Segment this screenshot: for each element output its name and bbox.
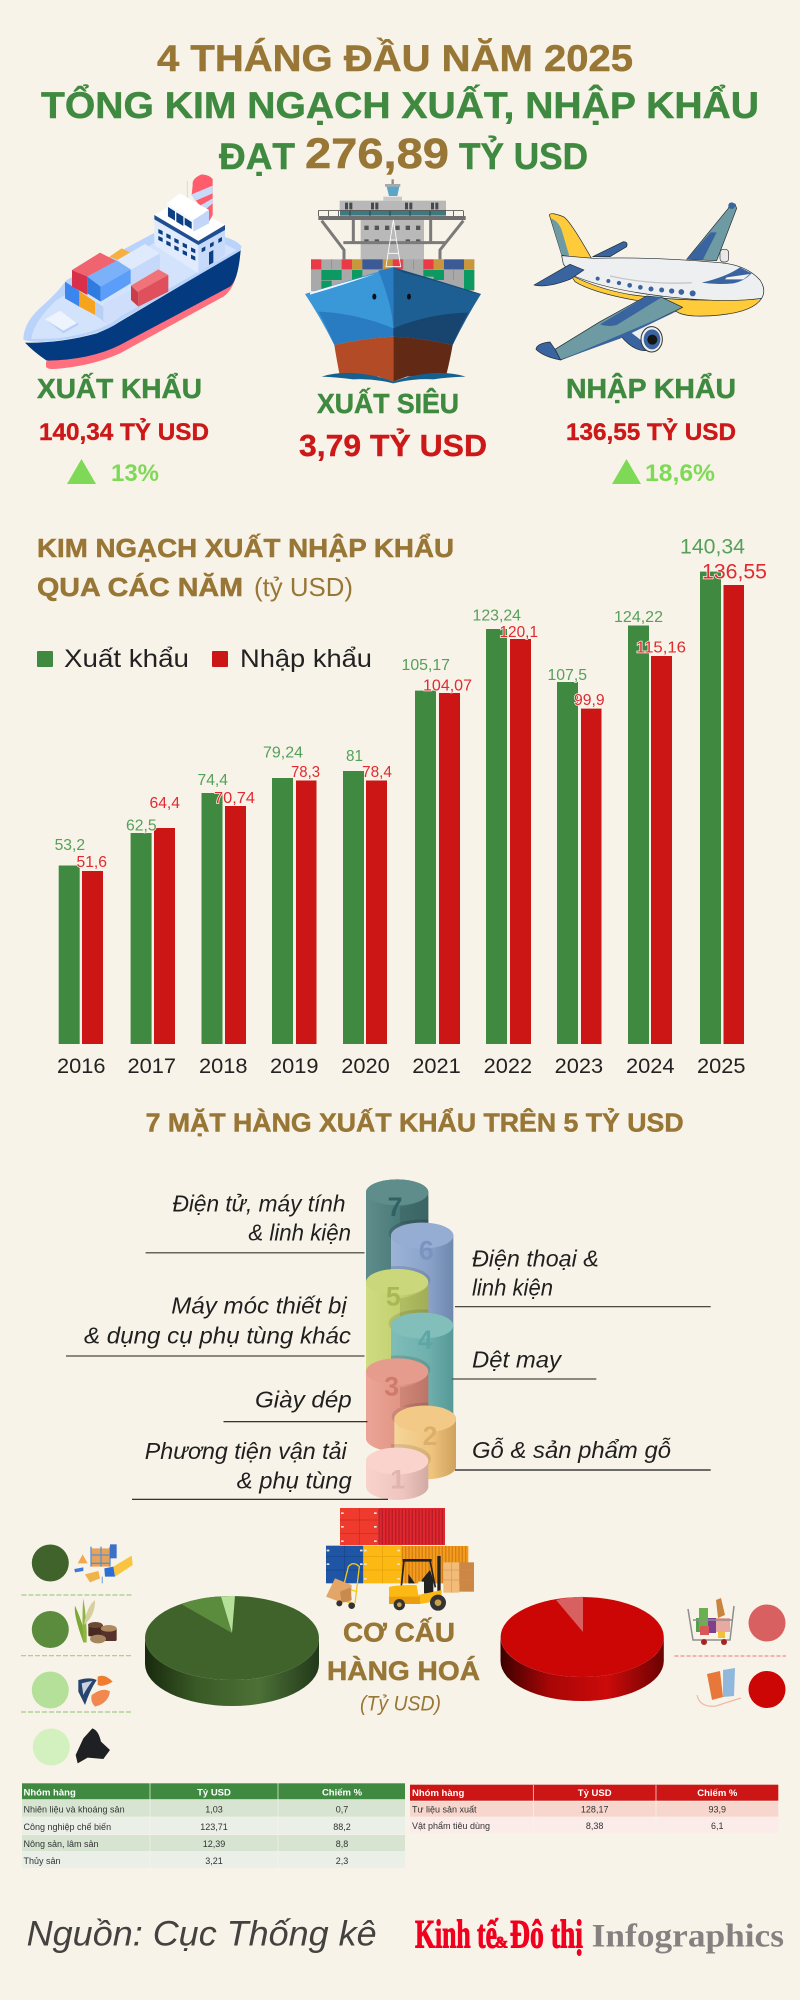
label: điện tử, máy tính: & linh kiện [248,1220,351,1246]
table: xuất khẩu: 1,03 [205,1805,223,1815]
icon: coal [76,1728,110,1763]
values: xuất khẩu: 62,5 [126,818,157,835]
stat: xuất khẩu: 13% [111,460,159,487]
stat: nhập khẩu: 136,55 TỶ USD [566,417,736,446]
logo: kinh tế và đô thị: Kinh tế [415,1912,498,1957]
table: xuất khẩu: 88,2 [333,1822,351,1832]
values: nhập khẩu: 64,4 [150,795,180,812]
title: 276,89 [305,130,449,178]
legend: Xuất khẩu [64,645,189,673]
table: nhập khẩu: 6,1 [711,1821,724,1831]
year axis: 2016 [57,1055,106,1078]
table: xuất khẩu: Thủy sản [24,1856,61,1866]
icon: container ship front view [305,179,481,383]
table: nhập khẩu: 93,9 [709,1805,726,1815]
table: xuất khẩu: Tỷ USD [197,1787,231,1798]
values: xuất khẩu: 79,24 [263,744,303,762]
year axis: 2020 [341,1055,390,1078]
pie chart: nhập khẩu [500,1597,664,1701]
table: xuất khẩu: 8,8 [336,1839,348,1849]
table: nhập khẩu: 128,17 [581,1805,608,1815]
heading: kim ngạch qua các năm: QUA CÁC NĂM [37,572,243,602]
values: xuất khẩu: 124,22 [614,609,663,626]
values: xuất khẩu: 140,34 [680,536,745,559]
heading: 7 mặt hàng: 7 MẶT HÀNG XUẤT KHẨU TRÊN 5 TỶ USD [146,1108,684,1138]
values: nhập khẩu [76,560,767,871]
bars: xuất khẩu [59,572,721,1044]
heading: kim ngạch qua các năm [37,533,454,602]
table: xuất khẩu: Nhiên liệu và khoáng sản [24,1805,125,1815]
label: điện thoại [455,1246,711,1307]
table: xuất khẩu: 2,3 [336,1856,348,1866]
year axis: 2017 [128,1055,176,1078]
year axis: 2025 [697,1055,746,1078]
stat: xuất siêu: 3,79 TỶ USD [299,428,487,463]
table: xuất khẩu: Chiếm % [322,1787,363,1798]
values: nhập khẩu: 51,6 [76,854,107,871]
stat: xuất khẩu: XUẤT KHẨU [37,373,202,404]
legend: xuất khẩu groups [21,1544,133,1766]
values: nhập khẩu: 78,4 [362,764,392,781]
cylinder stack: 5 [386,1282,401,1312]
cylinder stack: 7 [388,1192,402,1222]
cylinder stack: 6 [419,1235,434,1265]
table: xuất khẩu: 3,21 [205,1856,223,1866]
year axis: 2018 [199,1055,248,1078]
icon: warehouse and truck [74,1544,133,1583]
year axis [57,1055,746,1078]
cylinder stack [363,1179,458,1500]
table: nhập khẩu: Tư liệu sản xuất [412,1805,477,1815]
title: ĐẠT [219,136,295,177]
values: nhập khẩu: 70,74 [214,790,255,807]
label: máy móc thiết bị: & dụng cụ phụ tùng khác [84,1322,352,1348]
stat: xuất siêu [299,388,487,463]
heading: cơ cấu hàng hoá [327,1617,480,1716]
heading: cơ cấu hàng hoá: (Tỷ USD) [360,1693,441,1716]
title: 4 THÁNG ĐẦU NĂM 2025 [157,38,633,79]
year axis: 2019 [270,1055,318,1078]
label: điện tử, máy tính [146,1191,364,1253]
icon: thread spools [697,1668,741,1706]
table: xuất khẩu: Nhóm hàng [24,1787,76,1798]
stat: xuất khẩu [37,373,209,487]
label: giày dép: Giày dép [255,1387,352,1413]
values: nhập khẩu: 104,07 [423,678,472,695]
year axis: 2021 [412,1055,461,1078]
logo: kinh tế và đô thị: Đô thị [510,1912,583,1957]
heading: cơ cấu hàng hoá: CƠ CẤU [343,1617,455,1648]
label: máy móc thiết bị [66,1292,364,1356]
values: xuất khẩu: 105,17 [402,657,450,674]
title: TỶ USD [459,136,588,177]
stat: xuất khẩu: 140,34 TỶ USD [39,417,209,446]
year axis: 2023 [555,1055,603,1078]
table: nhập khẩu: Tỷ USD [578,1788,612,1799]
table: xuất khẩu: 0,7 [336,1805,348,1815]
label: phương tiện vận tải: Phương tiện vận tải [145,1438,348,1464]
stat: xuất siêu: XUẤT SIÊU [317,388,459,419]
icon: shopping cart [688,1598,734,1645]
year axis: 2024 [626,1055,675,1078]
pie chart: xuất khẩu [145,1596,319,1706]
cylinder stack: 1 [390,1464,405,1494]
table: nhập khẩu: Chiếm % [697,1788,738,1799]
values: nhập khẩu: 136,55 [702,560,767,584]
label: dệt may: Dệt may [472,1347,563,1373]
source: Nguồn: Cục Thống kê [27,1915,377,1954]
stat: nhập khẩu: NHẬP KHẨU [566,373,736,404]
values: nhập khẩu: 115,16 [636,640,686,657]
icon: airplane [534,202,764,360]
label: điện thoại: linh kiện [472,1275,553,1301]
legend [37,645,372,673]
table: nhập khẩu: Nhóm hàng [412,1788,464,1799]
table: nhập khẩu: 8,38 [586,1821,603,1831]
heading: cơ cấu hàng hoá: HÀNG HOÁ [327,1655,480,1686]
values: xuất khẩu: 53,2 [55,837,85,854]
logo: infographics: Infographics [592,1919,784,1955]
title: TỔNG KIM NGẠCH XUẤT, NHẬP KHẨU [41,83,759,126]
cylinder stack: 3 [384,1372,399,1402]
values: xuất khẩu: 81 [346,748,363,765]
table: xuất khẩu: Nông sản, lâm sản [24,1839,99,1849]
bars: nhập khẩu [82,585,744,1044]
values: xuất khẩu: 107,5 [548,667,587,684]
table: nhập khẩu: Vật phẩm tiêu dùng [412,1821,490,1831]
cylinder stack: 4 [418,1325,433,1355]
table: xuất khẩu: Công nghiệp chế biến [24,1822,111,1832]
values: xuất khẩu [55,536,745,854]
table: nhập khẩu [410,1785,778,1833]
label: điện tử, máy tính: Điện tử, máy tính [172,1191,346,1217]
heading: kim ngạch qua các năm: KIM NGẠCH XUẤT NHẬP KHẨU [37,533,454,563]
values: nhập khẩu: 78,3 [291,764,320,781]
table: xuất khẩu: 12,39 [203,1839,225,1849]
heading: kim ngạch qua các năm: (tỷ USD) [254,572,353,602]
label: điện thoại: Điện thoại & [472,1246,599,1272]
illustration: containers and forklift [326,1508,474,1611]
title [41,38,759,178]
table: xuất khẩu [22,1783,405,1868]
stat: nhập khẩu [566,373,736,487]
bar chart [55,536,767,1078]
stat: nhập khẩu: 18,6% [645,460,715,487]
values: xuất khẩu: 123,24 [472,608,521,624]
label: phương tiện vận tải [132,1438,388,1499]
values: nhập khẩu: 120,1 [500,624,538,641]
label: máy móc thiết bị: Máy móc thiết bị [171,1292,348,1318]
icon: seafood [78,1676,113,1707]
values: nhập khẩu: 99,9 [574,692,605,709]
legend: nhập khẩu groups [674,1598,786,1708]
icon: container ship [23,174,242,369]
logo: kinh tế và đô thị: & [495,1935,508,1952]
year axis: 2022 [484,1055,532,1078]
icon: rice and logs [75,1598,117,1643]
values: xuất khẩu: 74,4 [198,772,228,789]
table: xuất khẩu: 123,71 [200,1822,228,1832]
label: phương tiện vận tải: & phụ tùng [237,1467,352,1493]
label: gỗ và sản phẩm gỗ: Gỗ & sản phẩm gỗ [472,1436,671,1463]
cylinder stack: 2 [423,1421,437,1451]
legend: Nhập khẩu [240,645,372,673]
